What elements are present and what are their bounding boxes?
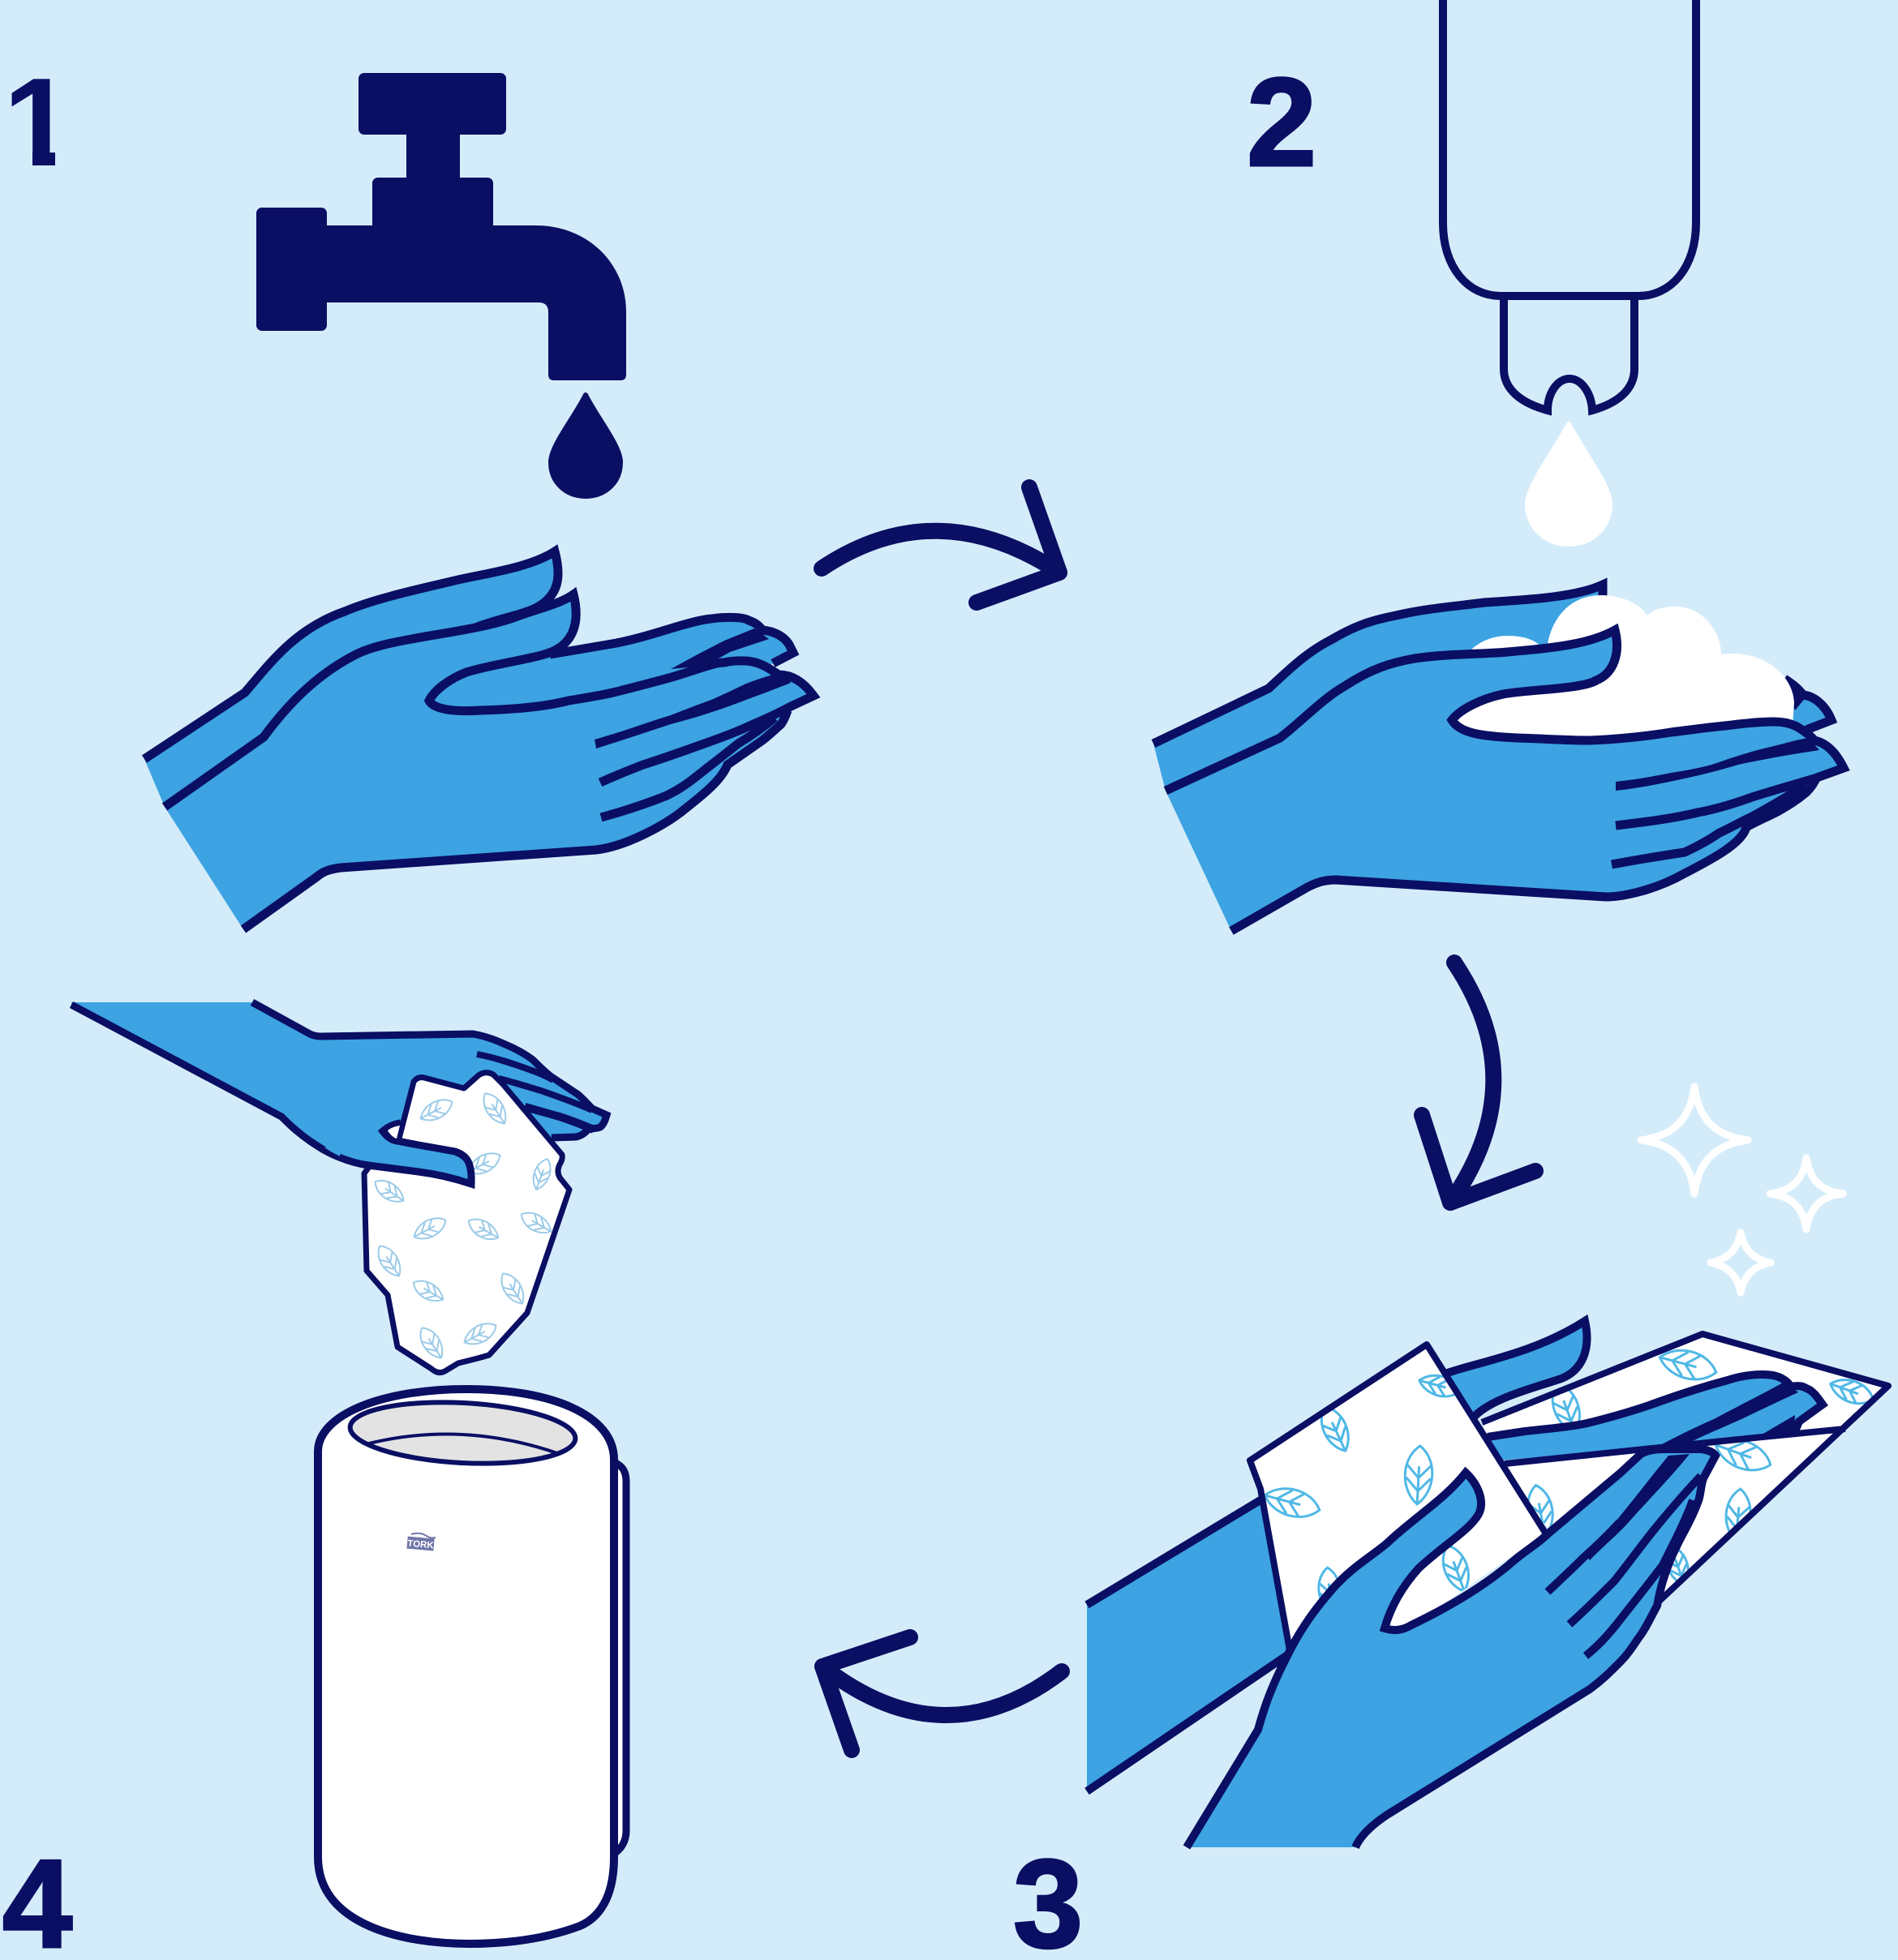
forearm (1087, 1499, 1290, 1791)
hand pair: step 2 with soap foam (1153, 585, 1844, 931)
back towel (1482, 1334, 1888, 1602)
waste bin (318, 1389, 626, 1944)
icon: soap dispenser with drop (1443, 0, 1696, 544)
thumb over towel (324, 1123, 471, 1184)
back thumb (1445, 1321, 1587, 1419)
step number 2: 2 (1247, 52, 1316, 192)
Tork logo (406, 1533, 436, 1551)
bin opening (349, 1397, 577, 1469)
front towel (1250, 1345, 1545, 1650)
Tork logo: TORK (407, 1539, 435, 1550)
arrow: step 3 to 4 (822, 1637, 1062, 1750)
arrow: step 2 to 3 (1422, 963, 1535, 1203)
arrow: step 1 to 2 (822, 487, 1059, 603)
hand dropping crumpled towel: step 4 (71, 1002, 607, 1373)
bin back rim (614, 1462, 626, 1853)
bin body (318, 1389, 614, 1944)
arm and fingers (71, 1002, 607, 1168)
hand pair: step 1 wet hands (144, 551, 814, 929)
step number 1: 1 (3, 52, 73, 192)
crumpled towel (364, 1073, 569, 1373)
back fingers (1488, 1375, 1845, 1464)
icon: sparkles (1641, 1087, 1843, 1293)
front hand (1187, 1449, 1716, 1847)
icon: water tap with drop (256, 73, 626, 496)
hands drying with paper towel: step 3 (1087, 1321, 1888, 1847)
